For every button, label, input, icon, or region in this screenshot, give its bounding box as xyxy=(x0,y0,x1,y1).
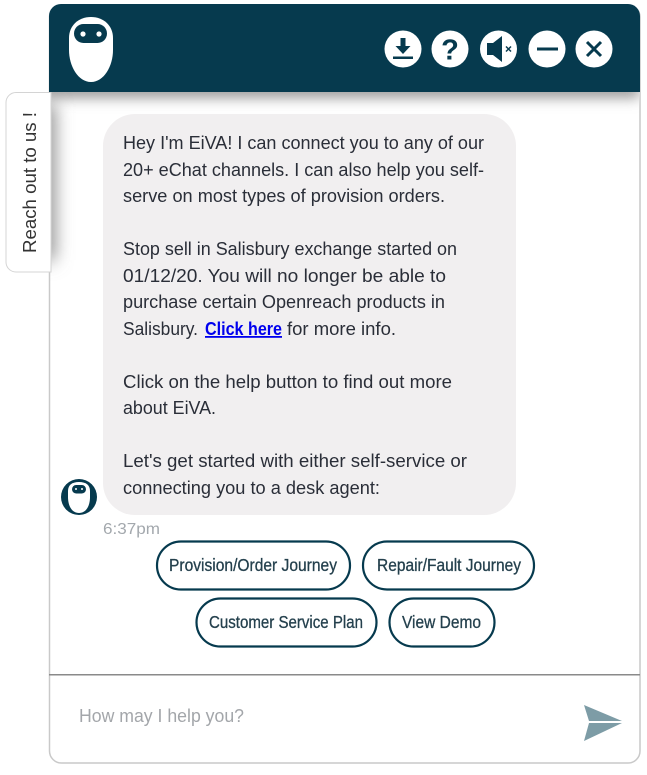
button: Repair/Fault Journey xyxy=(363,542,534,590)
icon: mute button xyxy=(480,30,517,68)
button: Provision/Order Journey xyxy=(157,542,350,590)
button: Customer Service Plan xyxy=(196,598,376,646)
timestamp: 6:37pm xyxy=(103,521,160,538)
message bubble: Let's get started with either self-service or xyxy=(123,451,467,471)
input divider xyxy=(49,674,640,676)
reach out side tab xyxy=(6,92,51,272)
message bubble: serve on most types of provision orders. xyxy=(123,186,445,206)
message bubble: about EiVA. xyxy=(123,398,216,418)
message bubble: Salisbury. xyxy=(123,319,198,339)
message bubble: Click here xyxy=(205,319,282,339)
tab shadow xyxy=(38,104,54,260)
message bubble: 20+ eChat channels. I can also help you self- xyxy=(123,160,484,180)
message bubble: connecting you to a desk agent: xyxy=(123,478,380,498)
header shadow xyxy=(40,82,640,97)
icon: help button: ? xyxy=(441,34,459,66)
message bubble xyxy=(103,114,516,515)
button: View Demo: View Demo xyxy=(402,612,481,632)
message bubble: Click on the help button to find out more xyxy=(123,372,452,392)
icon: EiVA robot logo xyxy=(69,17,113,82)
button: Repair/Fault Journey: Repair/Fault Journey xyxy=(377,555,521,575)
button: Customer Service Plan: Customer Service Plan xyxy=(209,612,363,632)
message bubble: Hey I'm EiVA! I can connect you to any of our xyxy=(123,133,484,153)
input placeholder: How may I help you? xyxy=(79,706,244,726)
icon: download button xyxy=(384,30,422,68)
icon: minimize button xyxy=(528,30,566,68)
message bubble: purchase certain Openreach products in xyxy=(123,292,445,312)
message bubble: for more info. xyxy=(287,319,396,339)
header bar xyxy=(49,4,640,92)
message bubble: 01/12/20. You will no longer be able to xyxy=(123,266,446,286)
icon: help button xyxy=(432,30,468,68)
icon: send arrow xyxy=(584,705,622,741)
reach out side tab: Reach out to us ! xyxy=(20,112,40,253)
icon: close button xyxy=(576,30,612,68)
icon: bot avatar xyxy=(61,479,97,515)
message bubble: Stop sell in Salisbury exchange started on xyxy=(123,239,457,259)
button: Provision/Order Journey: Provision/Order Journey xyxy=(169,555,337,575)
button: View Demo xyxy=(390,598,494,646)
